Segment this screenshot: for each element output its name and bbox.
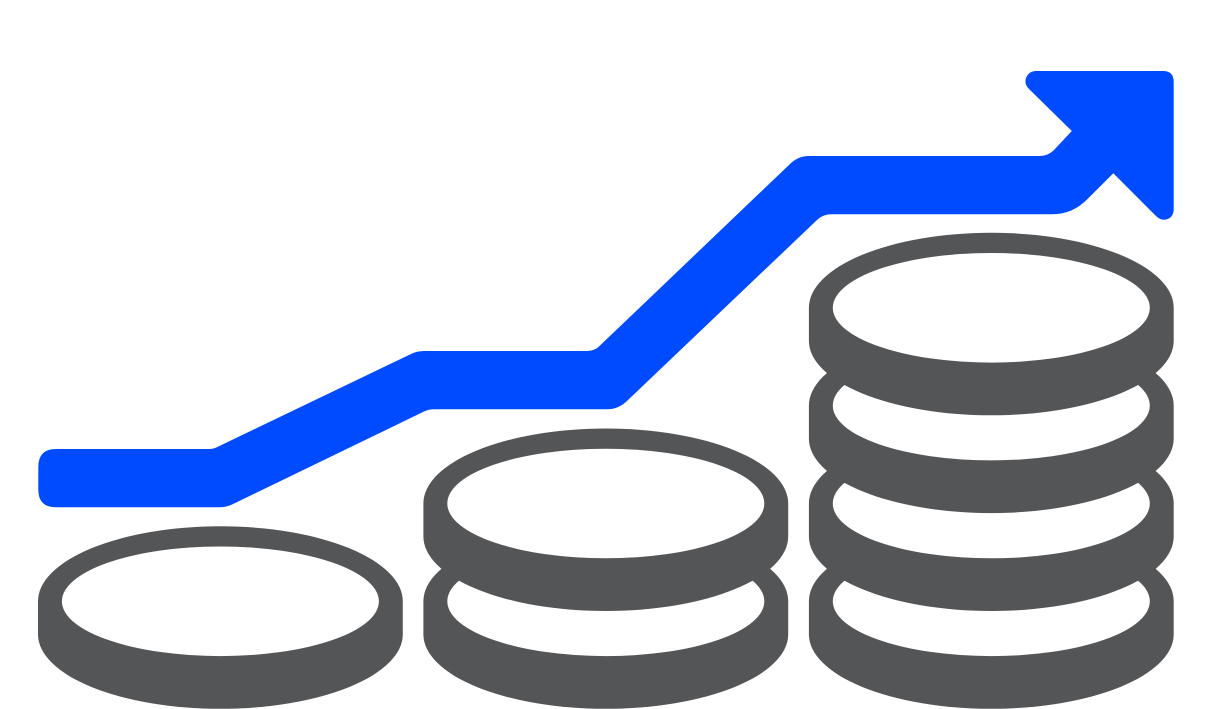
arrow: rising trend line (38, 71, 1174, 507)
coin stack: single coin (38, 526, 403, 709)
coin stack: four coins (809, 233, 1174, 709)
coin stack: two coins (423, 428, 788, 709)
